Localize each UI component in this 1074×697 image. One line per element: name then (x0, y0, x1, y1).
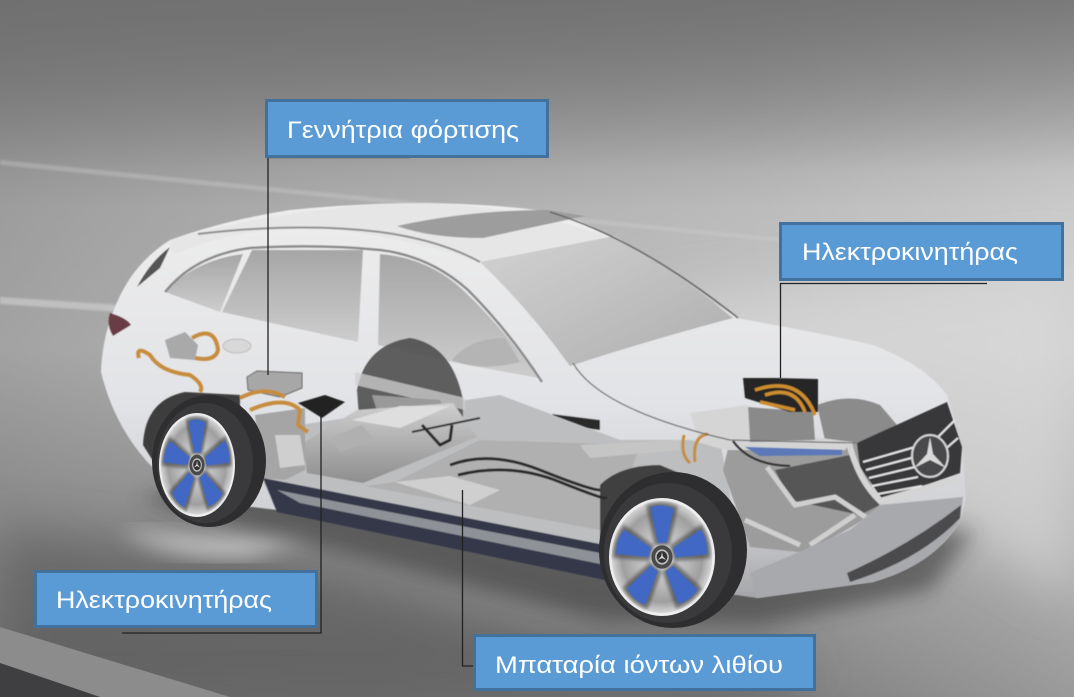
front radiator and upper block (747, 407, 815, 442)
roof rail (198, 227, 480, 262)
front tyre behind hood (817, 398, 897, 445)
windshield (480, 236, 733, 366)
charging socket (165, 332, 198, 360)
label: rear electric motor (36, 572, 316, 626)
label: charging generator: Γεννήτρια φόρτισης (287, 117, 519, 144)
side sill (263, 478, 605, 580)
running board (277, 490, 600, 564)
rear quarter window (165, 254, 243, 312)
front end (573, 363, 963, 598)
rear glass (137, 247, 170, 287)
label: lithium-ion battery (474, 636, 814, 690)
leader line: charging generator (268, 158, 410, 375)
rear door window (222, 250, 363, 342)
orange cables front (683, 434, 708, 463)
lower dark intake area (775, 455, 880, 515)
front door window (378, 254, 538, 378)
window trim (165, 246, 542, 382)
rear wheel (152, 395, 266, 527)
car body (101, 203, 966, 598)
rear motor area (255, 408, 305, 480)
label: front electric motor (780, 224, 1062, 280)
lower bumper (750, 497, 963, 598)
grille (857, 402, 962, 500)
floor coolant pipes (422, 425, 605, 498)
orange cables rear (138, 334, 308, 432)
see-through underbody (138, 332, 897, 580)
tail light (109, 313, 131, 336)
leader line: front motor (780, 284, 987, 378)
chrome surround (849, 443, 961, 501)
sunroof (397, 210, 585, 238)
lower bumper intake (847, 505, 961, 582)
front wheel arch dark (600, 465, 720, 560)
front wheel (599, 472, 747, 628)
EQC badge (552, 414, 600, 430)
label: front electric motor: Ηλεκτροκινητήρας (802, 239, 1018, 266)
black inverter (298, 395, 345, 418)
label: charging generator (266, 100, 548, 156)
leader line: rear motor (122, 410, 321, 633)
charging generator unit (247, 371, 302, 397)
grille bars (863, 420, 958, 494)
floor plate (365, 440, 640, 532)
label: rear electric motor: Ηλεκτροκινητήρας (56, 587, 272, 614)
star emblem (912, 435, 948, 477)
hood edge (573, 363, 857, 443)
front frame tubes (745, 467, 867, 545)
battery pack (303, 403, 477, 483)
blue headlight (745, 447, 842, 456)
rear-seat wheel arch tyre (357, 338, 463, 430)
roof highlight (170, 203, 615, 262)
translucent mid section (262, 395, 740, 575)
leader line: battery (462, 490, 476, 666)
pipe left of arch (580, 440, 680, 458)
rear wheel arch dark (143, 392, 240, 480)
door handle (223, 339, 251, 353)
front mechanical section (723, 440, 880, 553)
body shell (101, 203, 966, 598)
label: lithium-ion battery: Μπαταρία ιόντων λιθίου (495, 652, 783, 679)
car shadow (140, 480, 975, 625)
wing mirror (452, 338, 520, 367)
electric motor front power unit (743, 378, 818, 412)
